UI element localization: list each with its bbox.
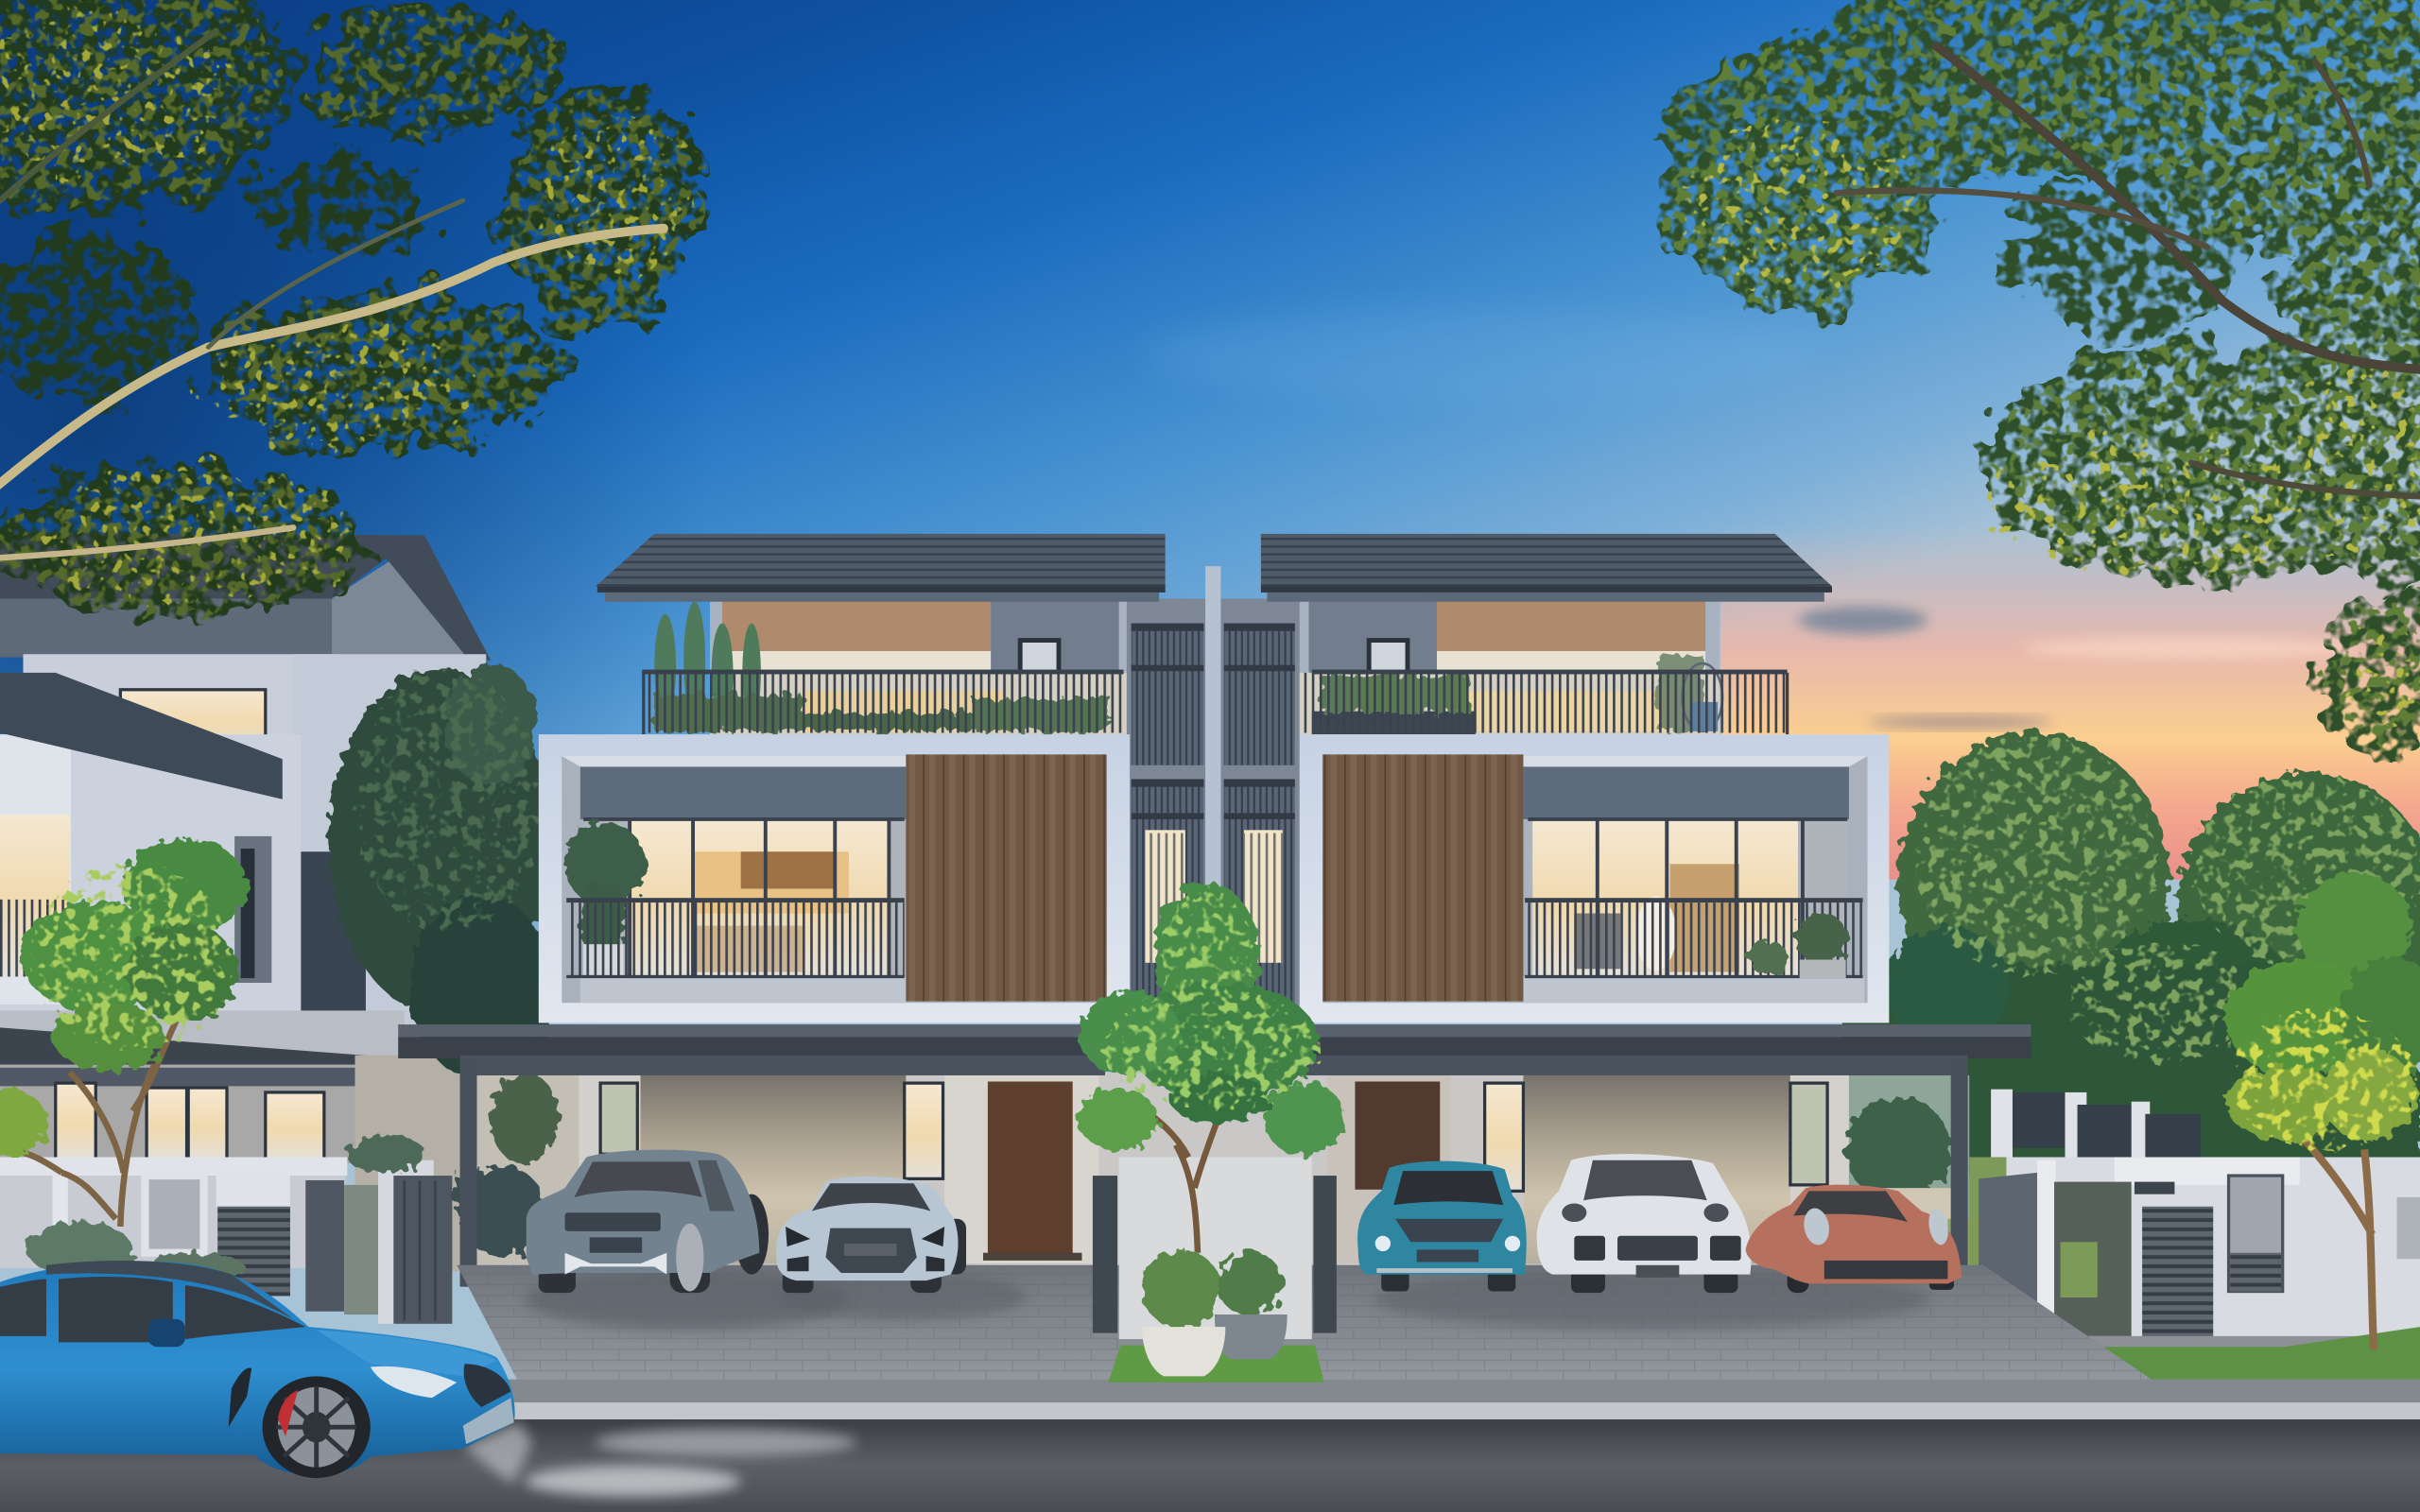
left second-floor frame: [539, 734, 1130, 1022]
lit foliage: [0, 15, 695, 597]
neighbour fence and gate: [0, 1157, 452, 1324]
car: white SUV: [1537, 1154, 1752, 1293]
neighbour second floor block: [0, 734, 301, 1043]
upper right tree: [1651, 0, 2420, 756]
central service core: [1119, 598, 1301, 1061]
road: [0, 1419, 2420, 1512]
lit foliage: [1683, 124, 2420, 729]
centre grass strip: [1108, 1346, 1324, 1383]
front fence wall: [2006, 1157, 2420, 1339]
shrubs behind left gate: [346, 1119, 552, 1244]
vertical screens: [1132, 624, 1295, 1026]
right street tree: [2225, 873, 2420, 1350]
neighbouring house left: [0, 532, 491, 1163]
left street tree: [0, 838, 247, 1227]
right wood cladding: [1322, 754, 1523, 1002]
car: copper sports car: [1746, 1185, 1962, 1293]
shrub by left fence: [27, 1222, 246, 1283]
blue car wheel: [263, 1376, 371, 1478]
left bedroom window: [583, 817, 905, 976]
neighbour porch: [0, 1010, 405, 1057]
main semi-detached house: [398, 534, 2031, 1287]
gap view right of carport wall: [1846, 1075, 1979, 1275]
car: grey SUV: [527, 1150, 769, 1293]
car: silver coupe: [776, 1177, 966, 1293]
right side fence and gate: [1969, 1090, 2420, 1383]
centre pots: [1141, 1249, 1288, 1376]
right bedroom window: [1528, 817, 1847, 976]
gap view left of carport wall: [458, 1073, 579, 1265]
cypress plants: [654, 602, 761, 722]
left balcony rail: [566, 898, 905, 978]
letterbox and louvres: [2135, 1176, 2420, 1338]
dark foliage: [0, 0, 710, 620]
car: teal SUV: [1357, 1161, 1527, 1292]
door and side lights: [600, 1081, 1827, 1261]
carport roof and columns: [398, 1024, 2031, 1287]
mid foliage: [0, 0, 702, 612]
branches: [0, 31, 664, 558]
rear fence: [1991, 1090, 2201, 1160]
pavement and kerb: [0, 1380, 2420, 1421]
neighbour roof: [0, 532, 491, 661]
right terrace planter: [1312, 656, 1722, 734]
central planter with gateposts: [1093, 1157, 1337, 1383]
left terrace planters: [654, 695, 1112, 731]
terrace railings: [642, 670, 1789, 734]
neighbour balcony rail: [0, 673, 283, 799]
ground floor carport wall: [458, 1073, 1979, 1275]
neighbour upper walls: [332, 561, 469, 741]
central column: [1205, 566, 1220, 1029]
left wood cladding: [906, 754, 1107, 1002]
dark foliage: [1651, 0, 2420, 756]
background tree left of main house: [329, 663, 552, 1271]
upper terrace back wall, right unit: [1300, 598, 1720, 734]
left potted plant: [565, 822, 645, 978]
right roof: [1261, 534, 1832, 602]
open gate: [1979, 1160, 2132, 1336]
centre feature tree: [1078, 883, 1344, 1253]
blue car in foreground: [0, 1261, 515, 1478]
right balcony pots: [1749, 914, 1847, 978]
upper left tree: [0, 0, 710, 620]
mid foliage: [1659, 0, 2420, 748]
upper terrace back wall, left unit: [710, 598, 1127, 734]
driveway: [457, 1265, 2152, 1380]
right balcony rail: [1525, 898, 1863, 978]
background trees right: [1844, 731, 2420, 1173]
left roof: [596, 534, 1166, 602]
branches: [1837, 46, 2420, 497]
right second-floor frame: [1300, 734, 1889, 1022]
paved apron and right lawn: [2052, 1327, 2420, 1383]
